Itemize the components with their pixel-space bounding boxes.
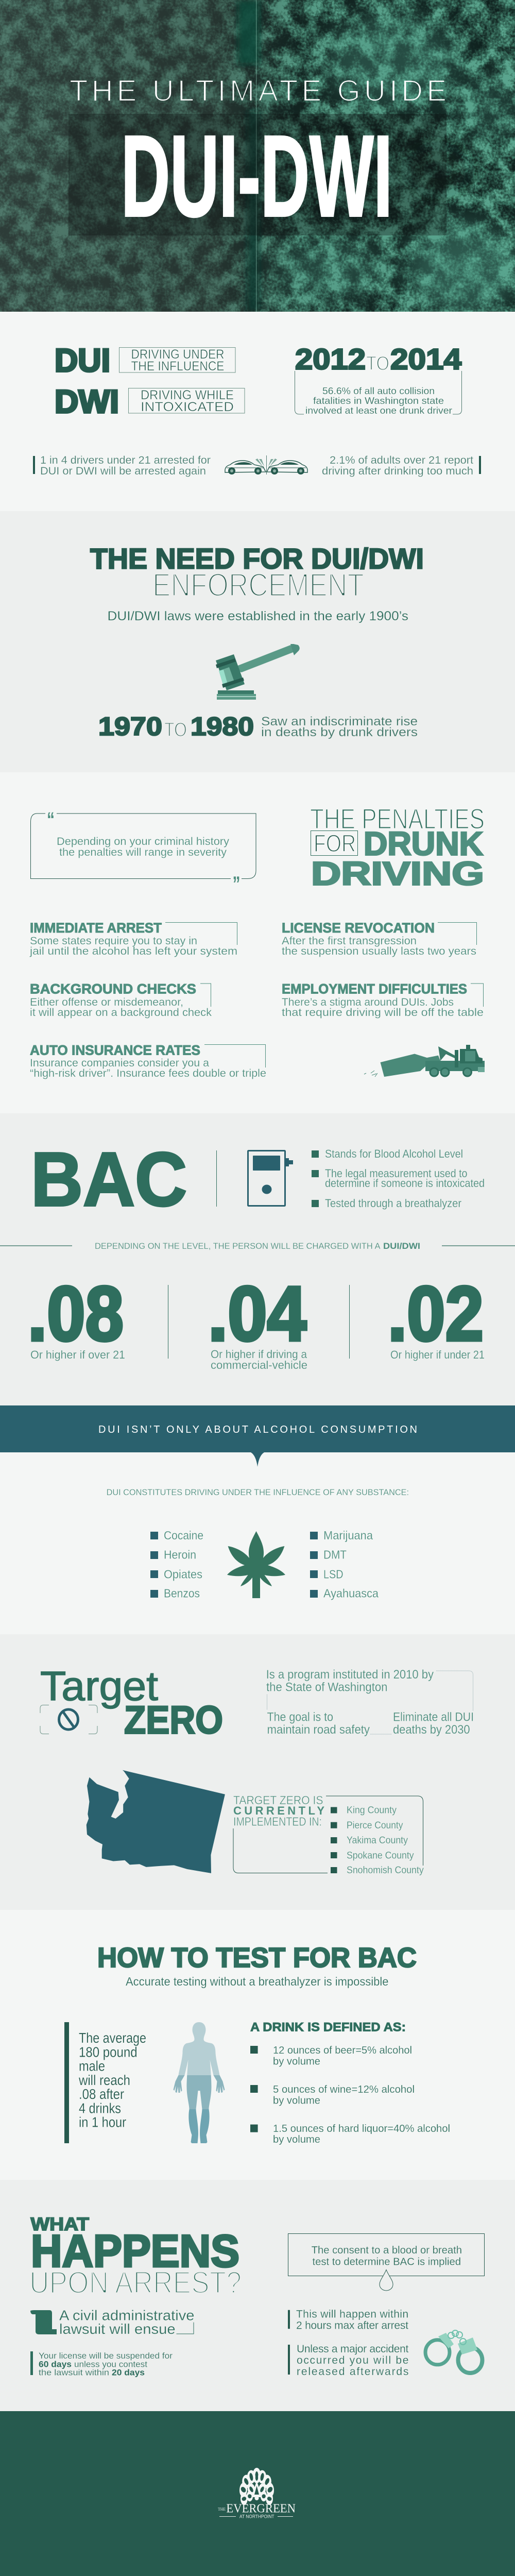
panel: footer bbox=[0, 2411, 515, 2576]
stat: adults over 21: 2.1% of adults over 21 report bbox=[330, 454, 473, 466]
text: program description: Is a program instituted in 2010 by bbox=[266, 1668, 434, 1682]
banner: DUI ISN’T ONLY ABOUT ALCOHOL CONSUMPTION bbox=[98, 1424, 417, 1435]
text: within 2 hours bbox=[288, 2309, 408, 2332]
logo: Evergreen at Northpoint: THE bbox=[218, 2507, 226, 2512]
text: released afterwards: occurred you will be bbox=[297, 2354, 408, 2366]
text: program description: The goal is to bbox=[267, 1710, 333, 1724]
forest background with road bbox=[0, 0, 515, 314]
list: a drink is defined as: 5 ounces of wine=12% alcohol bbox=[273, 2084, 415, 2095]
logo: Evergreen at Northpoint bbox=[218, 2468, 296, 2519]
panel: what happens upon arrest bbox=[0, 2180, 515, 2411]
callout: license suspension: 60 days bbox=[39, 2360, 72, 2369]
text: released afterwards: released afterwards bbox=[297, 2366, 408, 2378]
panel: penalties bbox=[0, 772, 515, 1113]
penalty: immediate arrest: jail until the alcohol has left your system bbox=[29, 945, 237, 957]
stat: adults over 21 bbox=[322, 454, 481, 477]
stat: 2012 to 2014: fatalities in Washington state bbox=[313, 396, 444, 406]
list: a drink is defined as: by volume bbox=[273, 2056, 320, 2067]
text: program description: deaths by 2030 bbox=[393, 1723, 470, 1737]
counties box: Snohomish County bbox=[347, 1865, 424, 1876]
heading: what happens upon arrest: HAPPENS bbox=[31, 2226, 239, 2277]
callout: civil lawsuit: A civil administrative bbox=[59, 2308, 195, 2324]
heading: the penalties for drunk driving: DRIVING bbox=[311, 855, 484, 892]
text: program description bbox=[266, 1668, 474, 1737]
quote box: “ bbox=[47, 808, 55, 831]
definition: DWI bbox=[55, 384, 245, 420]
counties box: Yakima County bbox=[347, 1835, 408, 1846]
counties box: TARGET ZERO IS bbox=[233, 1793, 323, 1807]
callout: license suspension: Your license will be suspended for bbox=[39, 2351, 173, 2361]
stat: 1970 to 1980: 1980 bbox=[191, 712, 254, 741]
BAC bullet list: The legal measurement used to bbox=[325, 1167, 468, 1180]
text: program description: maintain road safety bbox=[267, 1723, 370, 1737]
callout: average male bbox=[64, 2022, 146, 2143]
heading: what happens upon arrest: WHAT bbox=[31, 2214, 89, 2234]
text: laws established: DUI/DWI laws were established in the early 1900’s bbox=[107, 609, 408, 623]
callout: average male: 4 drinks bbox=[79, 2100, 121, 2116]
callout: license suspension: 20 days bbox=[112, 2368, 145, 2377]
list: left substances: Cocaine bbox=[164, 1529, 203, 1542]
penalty: license revocation: the suspension usually lasts two years bbox=[282, 945, 476, 957]
list: a drink is defined as: A DRINK IS DEFINED AS: bbox=[250, 2021, 406, 2034]
text: within 2 hours: 2 hours max after arrest bbox=[296, 2319, 408, 2332]
logo: Evergreen at Northpoint: EVERGREEN bbox=[226, 2502, 296, 2516]
penalty: license revocation: After the first transgression bbox=[282, 935, 417, 947]
heading: what happens upon arrest bbox=[29, 2214, 242, 2300]
stat: 1970 to 1980: Saw an indiscriminate rise bbox=[261, 715, 418, 728]
icon: gavel bbox=[216, 644, 300, 700]
definition: DUI: DRIVING UNDER bbox=[131, 347, 225, 362]
divider: charge level bbox=[0, 1241, 515, 1251]
icon: colliding cars bbox=[225, 455, 307, 474]
list: right substances: Marijuana bbox=[323, 1529, 373, 1542]
penalty: immediate arrest: Some states require you to stay in bbox=[30, 935, 197, 947]
BAC bullet list bbox=[312, 1147, 485, 1210]
penalty: license revocation bbox=[282, 920, 477, 957]
panel: how to test for BAC bbox=[0, 1910, 515, 2180]
counties box bbox=[233, 1793, 424, 1876]
definition: DWI: DRIVING WHILE bbox=[141, 388, 234, 402]
stat: repeat arrests under 21 bbox=[33, 454, 211, 477]
callout: implied consent: test to determine BAC is implied bbox=[312, 2257, 461, 2268]
stat: 2012 to 2014: involved at least one drunk driver bbox=[305, 405, 452, 416]
heading: the need for DUI/DWI: THE NEED FOR DUI/DWI bbox=[90, 543, 424, 575]
stat: 1970 to 1980: in deaths by drunk drivers bbox=[261, 725, 418, 739]
panel: target zero bbox=[0, 1634, 515, 1910]
penalty: auto insurance rates bbox=[30, 1043, 266, 1079]
BAC bullet list: Tested through a breathalyzer bbox=[325, 1197, 461, 1210]
stat: .08: .08 bbox=[28, 1270, 124, 1357]
divider: charge level: DUI/DWI bbox=[383, 1241, 420, 1251]
text: released afterwards bbox=[288, 2343, 409, 2378]
heading: what happens upon arrest: UPON ARREST? bbox=[29, 2265, 242, 2300]
stat: repeat arrests under 21: 1 in 4 drivers under 21 arrested for bbox=[40, 454, 211, 466]
penalty: background checks: Either offense or misdemeanor, bbox=[30, 996, 183, 1008]
definition: DWI: INTOXICATED bbox=[141, 400, 234, 414]
quote box bbox=[31, 808, 256, 895]
callout: average male: .08 after bbox=[79, 2086, 124, 2102]
stat: 1970 to 1980: TO bbox=[164, 719, 187, 741]
callout: implied consent bbox=[288, 2234, 484, 2291]
counties box: Spokane County bbox=[347, 1850, 414, 1861]
counties box: King County bbox=[347, 1805, 397, 1816]
penalty: employment difficulties: EMPLOYMENT DIFFICULTIES bbox=[282, 981, 467, 996]
stat: 2012 to 2014: TO bbox=[366, 353, 389, 375]
callout: average male: in 1 hour bbox=[79, 2114, 126, 2130]
icon: prohibition sign bbox=[40, 1705, 97, 1734]
text: within 2 hours: This will happen within bbox=[296, 2309, 408, 2320]
quote box: ” bbox=[233, 873, 240, 895]
definition: DUI: DUI bbox=[55, 343, 110, 379]
stat: 2012 to 2014 bbox=[295, 343, 461, 416]
icon: breathalyzer bbox=[248, 1151, 293, 1206]
counties box: Pierce County bbox=[347, 1820, 403, 1831]
list: left substances bbox=[150, 1529, 203, 1600]
text: program description: Eliminate all DUI bbox=[393, 1710, 474, 1724]
list: right substances: DMT bbox=[323, 1548, 347, 1562]
counties box: CURRENTLY bbox=[233, 1804, 324, 1817]
stat: .04: commercial-vehicle bbox=[211, 1359, 307, 1371]
list: a drink is defined as: by volume bbox=[273, 2134, 320, 2145]
BAC bullet list: determine if someone is intoxicated bbox=[325, 1177, 485, 1190]
heading: HOW TO TEST FOR BAC bbox=[97, 1942, 417, 1973]
penalty: background checks: it will appear on a background check bbox=[30, 1007, 212, 1019]
penalty: immediate arrest bbox=[29, 920, 237, 957]
stat: 2012 to 2014: 56.6% of all auto collision bbox=[322, 386, 435, 396]
heading: the penalties for drunk driving: FOR bbox=[314, 829, 356, 857]
heading: the penalties for drunk driving bbox=[310, 803, 485, 892]
counties box: IMPLEMENTED IN: bbox=[233, 1815, 322, 1828]
callout: civil lawsuit: lawsuit will ensue bbox=[59, 2321, 176, 2337]
callout: civil lawsuit bbox=[30, 2308, 195, 2337]
penalty: auto insurance rates: Insurance companies consider you a bbox=[30, 1057, 209, 1069]
penalty: immediate arrest: IMMEDIATE ARREST bbox=[30, 920, 162, 936]
subheading: DUI CONSTITUTES DRIVING UNDER THE INFLUENCE OF ANY SUBSTANCE: bbox=[107, 1487, 409, 1497]
icon: tow truck with car bbox=[364, 1045, 485, 1077]
stat: 1970 to 1980 bbox=[98, 712, 418, 741]
stat: 1970 to 1980: 1970 bbox=[98, 712, 162, 741]
penalty: background checks bbox=[30, 981, 212, 1019]
penalty: background checks: BACKGROUND CHECKS bbox=[30, 981, 196, 996]
panel: hero bbox=[0, 0, 515, 314]
penalty: license revocation: LICENSE REVOCATION bbox=[282, 920, 435, 936]
panel: substances bbox=[0, 1405, 515, 1634]
penalty: employment difficulties: There’s a stigma around DUIs. Jobs bbox=[282, 996, 454, 1008]
callout: average male: male bbox=[79, 2058, 105, 2074]
heading: BAC: BAC bbox=[31, 1137, 187, 1222]
stat: .08: Or higher if over 21 bbox=[30, 1348, 125, 1361]
list: left substances: Benzos bbox=[164, 1587, 200, 1600]
banner bbox=[0, 1405, 515, 1467]
stat: 2012 to 2014: 2014 bbox=[390, 343, 461, 376]
quote box: the penalties will range in severity bbox=[59, 846, 227, 858]
map: Washington state bbox=[87, 1770, 225, 1873]
list: a drink is defined as: by volume bbox=[273, 2095, 320, 2107]
callout: average male: will reach bbox=[78, 2072, 130, 2088]
list: a drink is defined as bbox=[250, 2021, 450, 2145]
panel: definitions background bbox=[0, 312, 515, 511]
quote box: Depending on your criminal history bbox=[57, 836, 230, 848]
text: program description: the State of Washington bbox=[266, 1681, 387, 1694]
callout: license suspension bbox=[30, 2351, 173, 2377]
subheading: Accurate testing without a breathalyzer is impossible bbox=[126, 1975, 388, 1988]
penalty: employment difficulties: that require driving will be off the table bbox=[282, 1007, 484, 1019]
heading: enforcement: ENFORCEMENT bbox=[152, 567, 364, 603]
heading: target zero bbox=[40, 1663, 223, 1742]
title: the ultimate guide: THE ULTIMATE GUIDE bbox=[70, 74, 447, 108]
list: a drink is defined as: 1.5 ounces of hard liquor=40% alcohol bbox=[273, 2123, 450, 2134]
penalty: auto insurance rates: AUTO INSURANCE RATES bbox=[30, 1043, 200, 1058]
stat: 2012 to 2014: 2012 bbox=[295, 343, 366, 376]
divider: charge level: DEPENDING ON THE LEVEL, THE PERSON WILL BE CHARGED WITH A bbox=[95, 1241, 381, 1251]
icon: human silhouette bbox=[173, 2022, 225, 2143]
stat: repeat arrests under 21: DUI or DWI will be arrested again bbox=[40, 465, 206, 477]
panel: need for enforcement bbox=[0, 511, 515, 772]
icon: blood drop bbox=[380, 2270, 393, 2291]
stat: .02: Or higher if under 21 bbox=[390, 1348, 485, 1361]
stat: .02: .02 bbox=[388, 1270, 484, 1357]
icon: cannabis leaf bbox=[227, 1531, 285, 1598]
callout: license suspension: unless you contest bbox=[74, 2360, 147, 2369]
definition: DWI: DWI bbox=[55, 384, 119, 420]
callout: implied consent: The consent to a blood or breath bbox=[312, 2245, 462, 2256]
icon: handcuffs bbox=[425, 2330, 482, 2373]
stat: .04: Or higher if driving a bbox=[211, 1348, 307, 1361]
list: left substances: Heroin bbox=[164, 1548, 196, 1562]
penalty: auto insurance rates: “high-risk driver”. Insurance fees double or triple bbox=[30, 1067, 266, 1079]
heading: target zero: ZERO bbox=[124, 1698, 223, 1742]
heading: the penalties for drunk driving: DRUNK bbox=[364, 825, 483, 862]
list: right substances: LSD bbox=[323, 1567, 343, 1581]
definition: DUI bbox=[55, 343, 235, 379]
stat: .04: .04 bbox=[208, 1270, 306, 1357]
callout: license suspension: the lawsuit within bbox=[39, 2368, 109, 2377]
list: a drink is defined as: 12 ounces of beer=5% alcohol bbox=[273, 2045, 412, 2056]
BAC bullet list: Stands for Blood Alcohol Level bbox=[325, 1147, 463, 1160]
heading: target zero: Target bbox=[40, 1663, 158, 1709]
definition: DUI: THE INFLUENCE bbox=[131, 359, 225, 374]
stat: adults over 21: driving after drinking too much bbox=[322, 465, 473, 477]
text: released afterwards: Unless a major accident bbox=[297, 2343, 409, 2355]
panel: BAC bbox=[0, 1113, 515, 1405]
list: left substances: Opiates bbox=[164, 1567, 202, 1581]
list: right substances bbox=[310, 1529, 379, 1600]
penalty: employment difficulties bbox=[282, 981, 484, 1019]
logo: Evergreen at Northpoint: AT NORTHPOINT bbox=[239, 2514, 274, 2519]
title overlay panel bbox=[68, 114, 447, 235]
callout: average male: The average bbox=[79, 2030, 146, 2046]
list: right substances: Ayahuasca bbox=[323, 1587, 379, 1600]
callout: average male: 180 pound bbox=[79, 2044, 138, 2060]
